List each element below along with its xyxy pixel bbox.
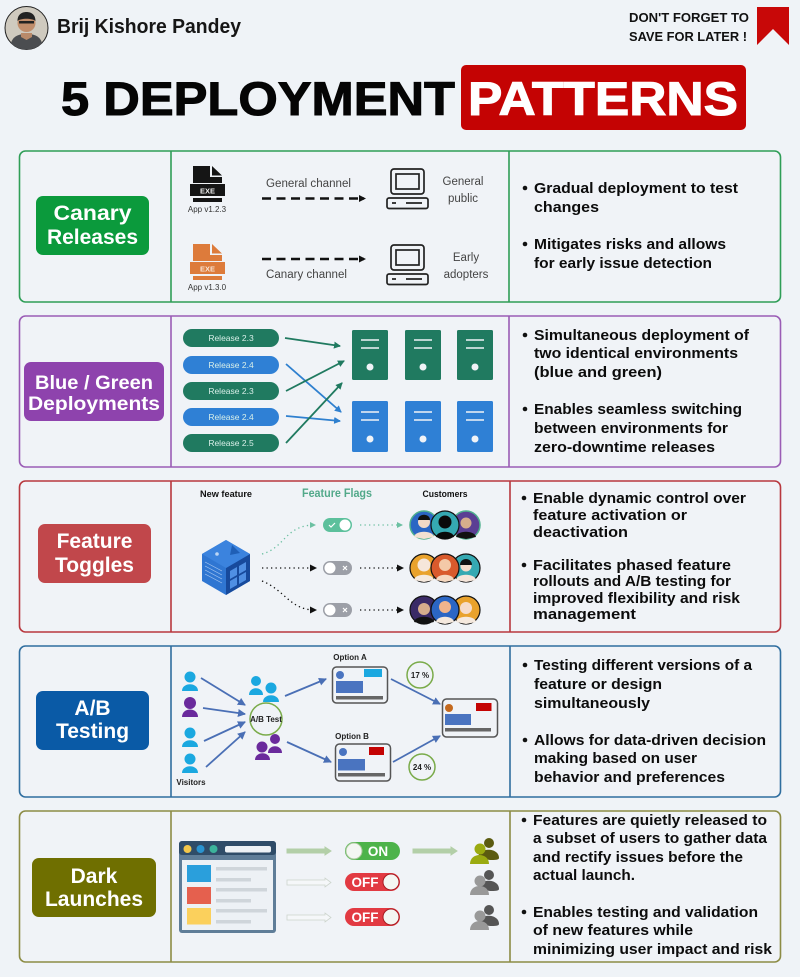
result: 17 percent: 17 % bbox=[411, 671, 429, 680]
text: early adopters: adopters bbox=[444, 269, 489, 281]
text: dark launches bullets bbox=[522, 812, 773, 958]
toggle: off bbox=[345, 873, 400, 891]
text: feature toggles bullets: rollouts and A/B testing for bbox=[533, 573, 731, 590]
column headings: Feature Flags bbox=[302, 488, 372, 500]
save reminder text: SAVE FOR LATER ! bbox=[629, 29, 747, 44]
text: blue green bullets bbox=[523, 327, 750, 456]
label: a/b testing: A/B bbox=[74, 697, 111, 720]
arrow: general channel bbox=[262, 178, 364, 198]
panel: canary releases bbox=[20, 151, 780, 302]
visitors: Visitors bbox=[176, 778, 206, 787]
text: canary bullets bbox=[523, 180, 738, 272]
green servers bbox=[352, 330, 493, 380]
icon: disabled users bbox=[470, 870, 499, 895]
release pills bbox=[183, 329, 279, 452]
toggle: off bbox=[323, 603, 352, 617]
toggle: off bbox=[345, 908, 400, 926]
panel: a/b testing bbox=[20, 646, 780, 797]
a/b test circle: A/B Test bbox=[250, 715, 282, 724]
text: dark launches bullets: Features are quietly released to bbox=[533, 812, 767, 829]
icon: orange exe file: App v1.3.0 bbox=[188, 283, 227, 292]
icon: black exe file: App v1.2.3 bbox=[188, 205, 227, 214]
label: blue green deployments bbox=[24, 362, 164, 421]
label: dark launches: Launches bbox=[45, 888, 143, 911]
text: general public: public bbox=[448, 193, 478, 205]
label: feature toggles bbox=[38, 524, 151, 583]
icon: feature cube bbox=[202, 540, 250, 595]
text: feature toggles bullets bbox=[522, 490, 746, 623]
icon: orange exe file bbox=[188, 244, 227, 292]
text: blue green bullets: two identical environments bbox=[534, 345, 738, 362]
customers row one bbox=[410, 511, 480, 539]
dotted arrows to toggles bbox=[262, 525, 315, 610]
release pills: Release 2.5 bbox=[208, 438, 254, 448]
text: a/b testing bullets bbox=[523, 657, 766, 786]
text: blue green bullets: between environments for bbox=[534, 420, 728, 437]
title: 5 DEPLOYMENT bbox=[61, 72, 455, 125]
author avatar bbox=[5, 6, 48, 50]
label: canary releases: Releases bbox=[47, 226, 138, 249]
result: 17 percent bbox=[407, 662, 433, 688]
card: option a bbox=[332, 653, 388, 703]
a/b test circle bbox=[250, 703, 282, 735]
icon: orange exe file: EXE bbox=[200, 264, 215, 274]
toggle: off: OFF bbox=[352, 875, 378, 890]
title: PATTERNS bbox=[468, 72, 738, 125]
icon: enabled users bbox=[470, 838, 499, 864]
text: a/b testing bullets: feature or design bbox=[534, 676, 662, 693]
text: feature toggles bullets: Enable dynamic control over bbox=[533, 490, 746, 507]
text: dark launches bullets: actual launch. bbox=[533, 867, 635, 884]
card: option b: Option B bbox=[335, 732, 369, 741]
text: dark launches bullets: Enables testing and validation bbox=[533, 904, 758, 921]
text: blue green bullets: zero-downtime releases bbox=[534, 439, 715, 456]
release pills: Release 2.4 bbox=[208, 360, 254, 370]
text: a/b testing bullets: simultaneously bbox=[534, 695, 651, 712]
result: 24 percent bbox=[409, 754, 435, 780]
routing arrows bbox=[285, 338, 344, 443]
icon: black exe file bbox=[188, 166, 227, 214]
icon: computer, general public bbox=[387, 169, 428, 208]
text: a/b testing bullets: Testing different versions of a bbox=[534, 657, 753, 674]
result: 24 percent: 24 % bbox=[413, 763, 431, 772]
panel: dark launches bbox=[20, 811, 780, 962]
label: blue green deployments: Blue / Green bbox=[35, 373, 153, 394]
label: dark launches bbox=[32, 858, 156, 917]
arrow: canary channel: Canary channel bbox=[266, 269, 347, 281]
release pills: Release 2.4 bbox=[208, 412, 254, 422]
text: feature toggles bullets: Facilitates phased feature bbox=[533, 557, 731, 574]
groups around a/b test bbox=[249, 676, 282, 760]
arrow: canary channel bbox=[262, 259, 364, 281]
text: feature toggles bullets: improved flexibility and risk bbox=[533, 590, 741, 607]
text: blue green bullets: Simultaneous deployment of bbox=[534, 327, 750, 344]
dotted arrows to customers bbox=[360, 525, 402, 610]
label: feature toggles: Feature bbox=[57, 530, 132, 553]
column headings: New feature bbox=[200, 489, 252, 500]
arrow: general channel: General channel bbox=[266, 178, 351, 190]
customers row two bbox=[410, 554, 480, 582]
icon: black exe file: EXE bbox=[200, 186, 215, 196]
visitors bbox=[176, 672, 206, 787]
text: dark launches bullets: a subset of users to gather data bbox=[533, 830, 768, 847]
panel: feature toggles bbox=[20, 481, 780, 632]
icon: bookmark bbox=[757, 7, 789, 45]
text: feature toggles bullets: deactivation bbox=[533, 524, 628, 541]
toggle: off: OFF bbox=[352, 910, 378, 925]
toggle: off bbox=[323, 561, 352, 575]
label: a/b testing bbox=[36, 691, 149, 750]
text: canary bullets: Gradual deployment to test bbox=[534, 180, 738, 197]
text: a/b testing bullets: behavior and preferences bbox=[534, 769, 725, 786]
release pills: Release 2.3 bbox=[208, 386, 254, 396]
toggle: on: ON bbox=[368, 844, 388, 859]
release pills: Release 2.3 bbox=[208, 333, 254, 343]
text: canary bullets: for early issue detection bbox=[534, 255, 712, 272]
text: dark launches bullets: minimizing user impact and risk bbox=[533, 941, 773, 958]
text: blue green bullets: (blue and green) bbox=[534, 364, 662, 381]
text: general public: General bbox=[443, 176, 483, 188]
toggle: on bbox=[345, 842, 400, 860]
text: feature toggles bullets: feature activation or bbox=[533, 507, 687, 524]
text: a/b testing bullets: making based on user bbox=[534, 750, 697, 767]
label: blue green deployments: Deployments bbox=[28, 394, 160, 415]
column headings bbox=[200, 488, 468, 500]
arrows: to toggles bbox=[287, 847, 331, 922]
arrows: test to options bbox=[285, 679, 440, 762]
text: blue green bullets: Enables seamless switching bbox=[534, 401, 742, 418]
label: dark launches: Dark bbox=[71, 865, 118, 888]
text: feature toggles bullets: management bbox=[533, 606, 636, 623]
label: canary releases: Canary bbox=[54, 202, 132, 225]
toggle: on bbox=[323, 518, 352, 532]
card: winning option bbox=[442, 699, 498, 737]
text: a/b testing bullets: Allows for data-driven decision bbox=[534, 732, 766, 749]
text: dark launches bullets: of new features while bbox=[533, 922, 693, 939]
panel: blue green deployments bbox=[20, 316, 780, 467]
label: canary releases bbox=[36, 196, 149, 255]
card: option a: Option A bbox=[333, 653, 367, 662]
text: early adopters: Early bbox=[453, 252, 479, 264]
text: dark launches bullets: and rectify issues before the bbox=[533, 849, 743, 866]
customers row three bbox=[410, 596, 480, 624]
arrow: to users bbox=[413, 847, 457, 855]
blue servers bbox=[352, 401, 493, 452]
card: option b bbox=[335, 732, 390, 781]
author name: Brij Kishore Pandey bbox=[57, 16, 242, 38]
text: canary bullets: changes bbox=[534, 199, 599, 216]
text: general public bbox=[443, 176, 483, 205]
icon: disabled users bbox=[470, 905, 499, 930]
icon: browser window bbox=[179, 841, 276, 933]
label: feature toggles: Toggles bbox=[55, 554, 134, 577]
save reminder text bbox=[629, 10, 749, 44]
icon: computer, early adopters bbox=[387, 245, 428, 284]
column headings: Customers bbox=[422, 489, 468, 500]
save reminder text: DON'T FORGET TO bbox=[629, 10, 749, 25]
arrows: visitors to test bbox=[201, 678, 245, 767]
title bbox=[61, 65, 746, 130]
text: early adopters bbox=[444, 252, 489, 281]
label: a/b testing: Testing bbox=[56, 720, 129, 743]
text: canary bullets: Mitigates risks and allows bbox=[534, 236, 726, 253]
